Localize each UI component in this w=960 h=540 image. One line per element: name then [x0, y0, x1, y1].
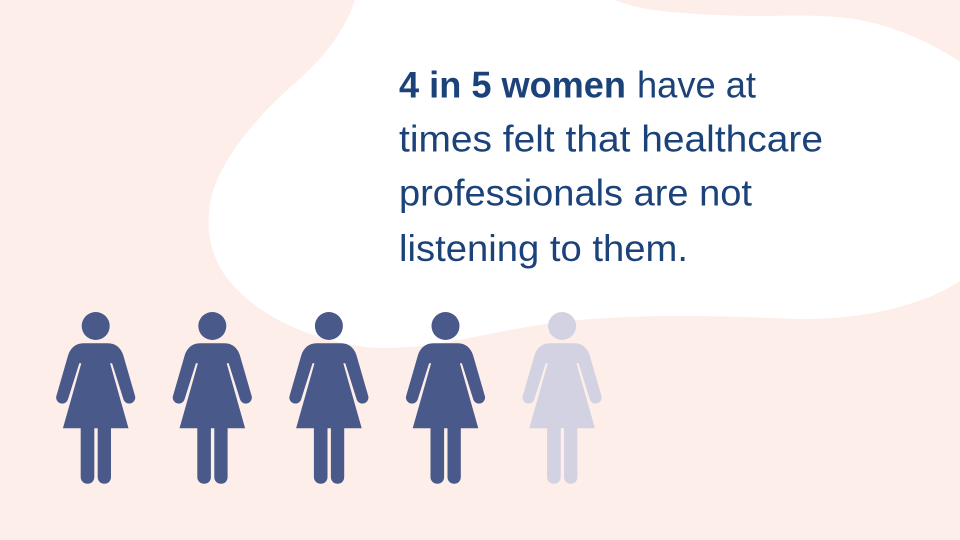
line 1 regular: have at	[637, 64, 757, 105]
pictogram row: 4 of 5 women	[56, 312, 602, 484]
icon: woman 3	[289, 312, 368, 484]
line 1 bold: 4 in 5 women	[399, 64, 626, 105]
headline text	[399, 64, 823, 269]
line 4: listening to them.	[399, 228, 688, 269]
white blob	[209, 0, 960, 348]
icon: woman 5 faded	[523, 312, 602, 484]
icon: woman 1	[56, 312, 135, 484]
line 2: times felt that healthcare	[399, 119, 823, 160]
line 3: professionals are not	[399, 173, 753, 214]
icon: woman 4	[406, 312, 485, 484]
icon: woman 2	[173, 312, 252, 484]
